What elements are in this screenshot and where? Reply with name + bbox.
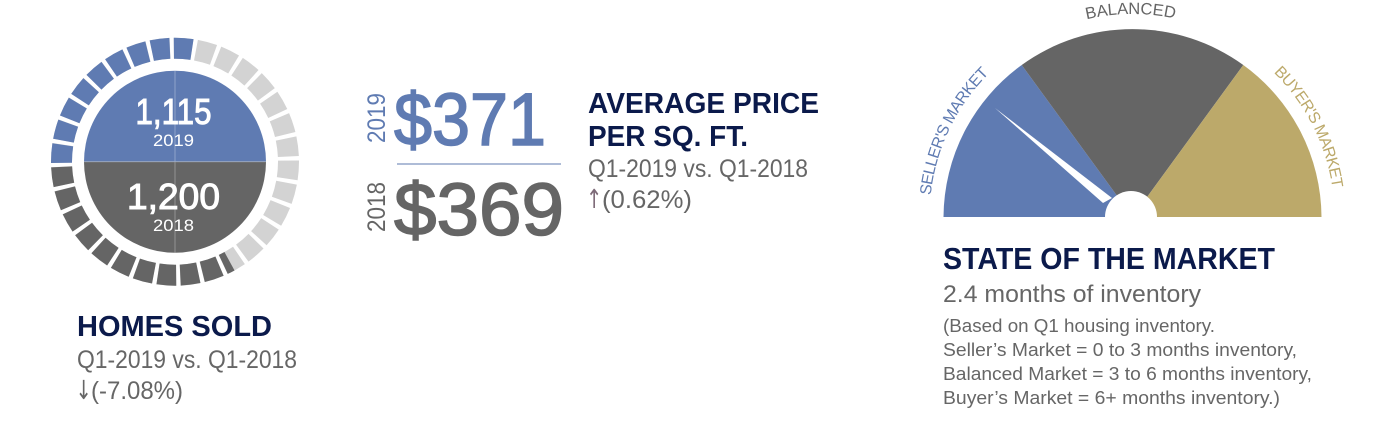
gauge segment: buyer's market	[1132, 65, 1322, 217]
gauge label: seller's market: SELLER'S MARKET	[920, 66, 986, 194]
donut chart: homes sold	[17, 4, 333, 319]
text: comparison period: Q1-2019 vs. Q1-2018	[588, 155, 808, 183]
heading: homes sold: HOMES SOLD	[77, 311, 272, 343]
value: $371: $371	[394, 78, 546, 161]
disc: 2018 half	[84, 162, 266, 253]
text: market definitions: Seller’s Market = 0 to 3 months inventory,	[943, 340, 1297, 360]
ring: 2019 blue segments	[60, 47, 290, 276]
heading: average price: AVERAGE PRICE	[588, 88, 819, 120]
text: comparison period: Q1-2019 vs. Q1-2018	[77, 346, 297, 374]
text: change: ↑	[586, 185, 602, 215]
gauge label: balanced: BALANCED	[1086, 2, 1176, 19]
gauge	[920, 2, 1344, 217]
ring: 2018 dark segments	[17, 4, 333, 319]
text: change: ↓	[76, 376, 92, 406]
value: 1,115: 1,115	[136, 91, 212, 132]
value: 1,200: 1,200	[127, 176, 220, 217]
value: $369: $369	[394, 168, 564, 251]
text: market definitions: Buyer’s Market = 6+ months inventory.)	[943, 388, 1280, 408]
disc: 2019 half	[84, 71, 266, 162]
gauge segment: balanced	[1022, 29, 1243, 217]
needle	[995, 108, 1112, 203]
ring: remaining grey segments	[60, 47, 290, 276]
panel: average price per square foot	[363, 78, 819, 251]
text: market definitions: Balanced Market = 3 to 6 months inventory,	[943, 364, 1312, 384]
text: market definitions	[943, 316, 1312, 408]
label: 2018 rotated: 2018	[363, 182, 391, 232]
text: change: (-7.08%)	[91, 377, 183, 405]
gauge segment: seller's market	[944, 65, 1132, 217]
heading: state of the market: STATE OF THE MARKET	[943, 241, 1275, 276]
panel: state of the market	[920, 2, 1344, 408]
panel: homes sold	[17, 4, 333, 406]
gauge label: buyer's market: BUYER'S MARKET	[1274, 66, 1344, 186]
label: 2019 rotated: 2019	[363, 93, 391, 143]
label: 2019: 2019	[153, 131, 194, 150]
text: months of inventory: 2.4 months of inventory	[943, 281, 1201, 308]
text: market definitions: (Based on Q1 housing inventory.	[943, 316, 1215, 336]
label: 2018: 2018	[153, 216, 194, 235]
gauge hub	[1105, 191, 1157, 217]
text: change: (0.62%)	[602, 186, 692, 214]
heading: per sq. ft.: PER SQ. FT.	[588, 121, 748, 153]
